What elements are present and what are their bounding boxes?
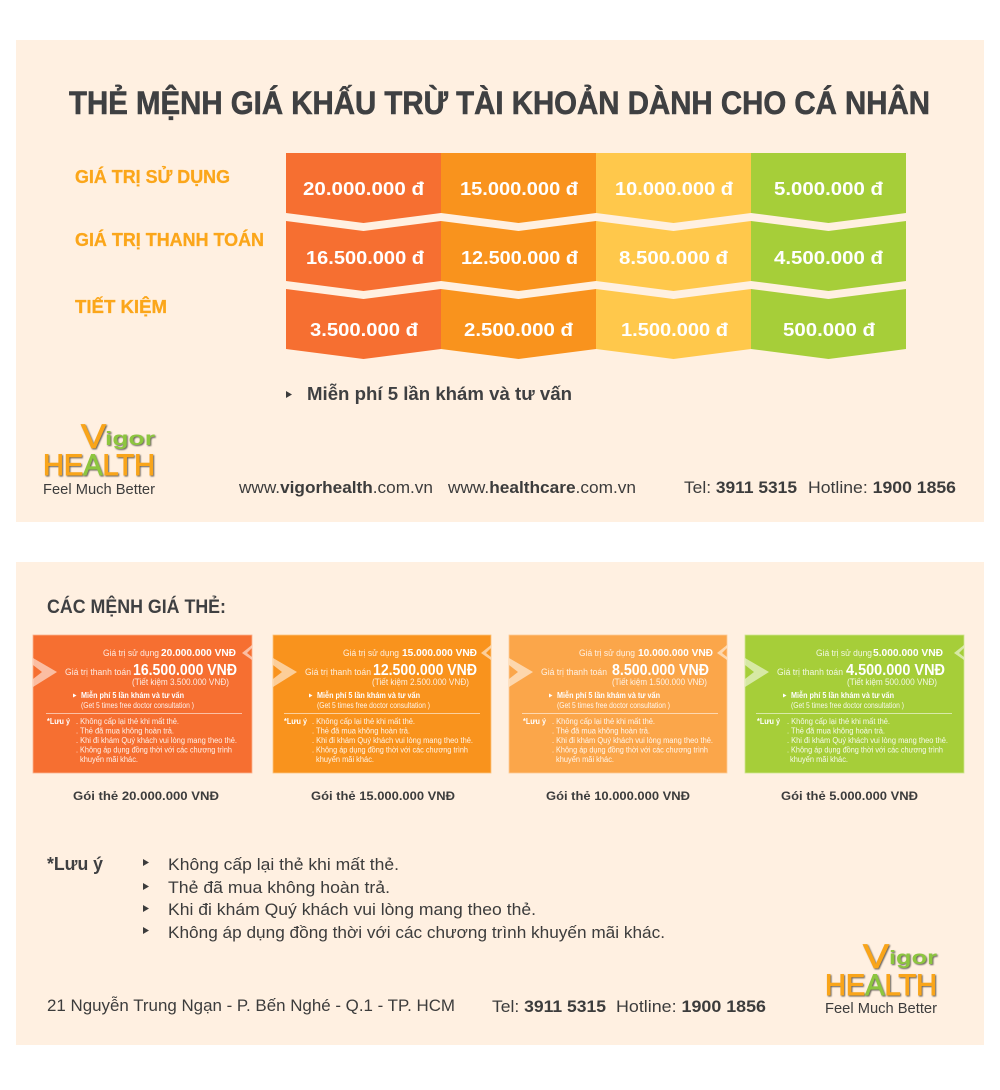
card: 10.000.000: . Khi đi khám Quý khách vui lòng mang theo thẻ. xyxy=(552,736,713,745)
phone numbers: Tel: 3911 5315 xyxy=(492,997,606,1016)
card: 10.000.000: 8.500.000 VNĐ xyxy=(612,662,709,679)
card: 20.000.000: 20.000.000 VNĐ xyxy=(161,647,236,659)
card: 5.000.000 xyxy=(745,635,964,773)
card: 20.000.000: (Tiết kiệm 3.500.000 VNĐ) xyxy=(132,677,229,687)
column: 20.000.000: 3.500.000 đ xyxy=(310,320,418,340)
card: 10.000.000: Miễn phí 5 lần khám và tư vấn xyxy=(557,690,660,700)
logo: Feel Much Better xyxy=(825,1001,937,1017)
caption: 5.000.000: Gói thẻ 5.000.000 VNĐ xyxy=(781,789,918,803)
column: 20.000.000: 16.500.000 đ xyxy=(306,248,424,268)
card: 5.000.000: . Khi đi khám Quý khách vui lòng mang theo thẻ. xyxy=(787,736,948,745)
logo: igor xyxy=(105,429,156,450)
column: 10.000.000: 10.000.000 đ xyxy=(615,179,733,199)
column: 10.000.000: 8.500.000 đ xyxy=(619,248,728,268)
card: 10.000.000: khuyến mãi khác. xyxy=(556,755,614,764)
logo: igor xyxy=(889,948,938,969)
phone numbers xyxy=(492,997,766,1016)
column: 5.000.000 xyxy=(751,153,906,359)
card: 10.000.000: (Get 5 times free doctor consultation ) xyxy=(557,701,670,710)
card: 15.000.000: . Không cấp lại thẻ khi mất thẻ. xyxy=(312,717,415,726)
card: 10.000.000: . Không cấp lại thẻ khi mất thẻ. xyxy=(552,717,655,726)
card: 15.000.000: . Khi đi khám Quý khách vui lòng mang theo thẻ. xyxy=(312,736,473,745)
card: 20.000.000: . Khi đi khám Quý khách vui lòng mang theo thẻ. xyxy=(76,736,237,745)
websites xyxy=(238,478,636,497)
logo: V xyxy=(81,418,106,456)
card: 10.000.000: . Không áp dụng đồng thời với các chương trình xyxy=(552,746,708,754)
card: 15.000.000: . Thẻ đã mua không hoàn trả. xyxy=(312,726,410,736)
card: 20.000.000: Giá trị sử dụng xyxy=(103,648,159,658)
card: 10.000.000: (Tiết kiệm 1.500.000 VNĐ) xyxy=(612,677,707,687)
column: 15.000.000: 12.500.000 đ xyxy=(461,248,578,268)
card: 15.000.000: Giá trị thanh toán xyxy=(305,667,371,677)
card: 15.000.000: (Get 5 times free doctor consultation ) xyxy=(317,701,430,710)
card: 5.000.000: Miễn phí 5 lần khám và tư vấn xyxy=(791,690,894,700)
logo xyxy=(825,938,938,1017)
card: 10.000.000: Giá trị sử dụng xyxy=(579,648,635,658)
card: 20.000.000: 16.500.000 VNĐ xyxy=(133,662,237,679)
card: 5.000.000: . Thẻ đã mua không hoàn trả. xyxy=(787,726,885,736)
card: 15.000.000: Miễn phí 5 lần khám và tư vấn xyxy=(317,690,420,700)
card: 15.000.000: . Không áp dụng đồng thời với các chương trình xyxy=(312,746,468,754)
card: 20.000.000: (Get 5 times free doctor consultation ) xyxy=(81,701,194,710)
notes: *Lưu ý xyxy=(47,854,103,874)
row labels: TIẾT KIỆM xyxy=(75,296,167,317)
card: 10.000.000: *Lưu ý xyxy=(523,716,546,726)
heading: CÁC MỆNH GIÁ THẺ: xyxy=(47,596,226,618)
card: 15.000.000: 15.000.000 VNĐ xyxy=(402,647,477,659)
column: 10.000.000: 1.500.000 đ xyxy=(621,320,728,340)
free consultation note: Miễn phí 5 lần khám và tư vấn xyxy=(307,383,572,404)
address: 21 Nguyễn Trung Ngạn - P. Bến Nghé - Q.1 - TP. HCM xyxy=(47,996,455,1015)
panel: top price table xyxy=(16,40,984,522)
notes xyxy=(47,854,665,942)
card: 20.000.000: . Thẻ đã mua không hoàn trả. xyxy=(76,726,174,736)
card: 10.000.000: Giá trị thanh toán xyxy=(541,667,607,677)
card: 10.000.000 xyxy=(509,635,727,773)
caption: 10.000.000: Gói thẻ 10.000.000 VNĐ xyxy=(546,789,690,803)
column: 20.000.000: 20.000.000 đ xyxy=(303,179,424,199)
card: 15.000.000 xyxy=(273,635,491,773)
card: 15.000.000: Giá trị sử dụng xyxy=(343,648,399,658)
card: 20.000.000: . Không áp dụng đồng thời với các chương trình xyxy=(76,746,232,754)
row labels: GIÁ TRỊ SỬ DỤNG xyxy=(75,166,230,187)
card: 20.000.000: khuyến mãi khác. xyxy=(80,755,138,764)
notes: Khi đi khám Quý khách vui lòng mang theo thẻ. xyxy=(168,900,536,919)
caption: 15.000.000: Gói thẻ 15.000.000 VNĐ xyxy=(311,789,455,803)
column: 15.000.000: 2.500.000 đ xyxy=(464,320,573,340)
card: 5.000.000: . Không áp dụng đồng thời với các chương trình xyxy=(787,746,943,754)
card: 20.000.000: *Lưu ý xyxy=(47,716,70,726)
notes: Không cấp lại thẻ khi mất thẻ. xyxy=(168,855,399,874)
card: 5.000.000: *Lưu ý xyxy=(757,716,780,726)
card: 15.000.000: *Lưu ý xyxy=(284,716,307,726)
card: 5.000.000: 5.000.000 VNĐ xyxy=(873,647,943,659)
notes: Thẻ đã mua không hoàn trả. xyxy=(168,878,390,897)
logo: Feel Much Better xyxy=(43,482,155,498)
card: 20.000.000: . Không cấp lại thẻ khi mất thẻ. xyxy=(76,717,179,726)
phone numbers: Tel: 3911 5315 xyxy=(684,478,797,497)
phone numbers: Hotline: 1900 1856 xyxy=(616,997,766,1016)
card: 5.000.000: . Không cấp lại thẻ khi mất thẻ. xyxy=(787,717,890,726)
card: 20.000.000 xyxy=(33,635,252,773)
card: 5.000.000: (Get 5 times free doctor consultation ) xyxy=(791,701,904,710)
card: 5.000.000: (Tiết kiệm 500.000 VNĐ) xyxy=(847,677,937,687)
logo: HEALTH xyxy=(825,969,937,1002)
card: 15.000.000: (Tiết kiệm 2.500.000 VNĐ) xyxy=(372,677,469,687)
panel: card denominations xyxy=(16,562,984,1045)
card: 5.000.000: 4.500.000 VNĐ xyxy=(846,662,945,679)
logo: V xyxy=(863,938,889,976)
notes: Không áp dụng đồng thời với các chương trình khuyến mãi khác. xyxy=(168,923,665,942)
card: 15.000.000: 12.500.000 VNĐ xyxy=(373,662,477,679)
caption: 20.000.000: Gói thẻ 20.000.000 VNĐ xyxy=(73,789,219,803)
card: 5.000.000: Giá trị thanh toán xyxy=(777,667,843,677)
column: 15.000.000: 15.000.000 đ xyxy=(460,179,578,199)
card: 5.000.000: khuyến mãi khác. xyxy=(790,755,848,764)
card: 15.000.000: khuyến mãi khác. xyxy=(316,755,374,764)
phone numbers xyxy=(684,478,956,497)
column: 5.000.000: 4.500.000 đ xyxy=(774,248,883,268)
phone numbers: Hotline: 1900 1856 xyxy=(808,478,956,497)
column: 20.000.000 xyxy=(286,153,441,359)
title: THẺ MỆNH GIÁ KHẤU TRỪ TÀI KHOẢN DÀNH CHO CÁ NHÂN xyxy=(69,84,930,121)
column: 15.000.000 xyxy=(441,153,596,359)
card: 10.000.000: . Thẻ đã mua không hoàn trả. xyxy=(552,726,650,736)
websites: www.vigorhealth.com.vn xyxy=(238,478,433,497)
column: 5.000.000: 500.000 đ xyxy=(783,320,875,340)
column: 10.000.000 xyxy=(596,153,751,359)
card: 5.000.000: Giá trị sử dụng xyxy=(816,648,872,658)
websites: www.healthcare.com.vn xyxy=(447,478,636,497)
column: 5.000.000: 5.000.000 đ xyxy=(774,179,883,199)
row labels xyxy=(75,166,264,317)
logo: HEALTH xyxy=(43,449,155,482)
card: 20.000.000: Giá trị thanh toán xyxy=(65,667,131,677)
card: 10.000.000: 10.000.000 VNĐ xyxy=(638,647,713,659)
logo xyxy=(43,418,156,498)
card: 20.000.000: Miễn phí 5 lần khám và tư vấn xyxy=(81,690,184,700)
row labels: GIÁ TRỊ THANH TOÁN xyxy=(75,229,264,250)
